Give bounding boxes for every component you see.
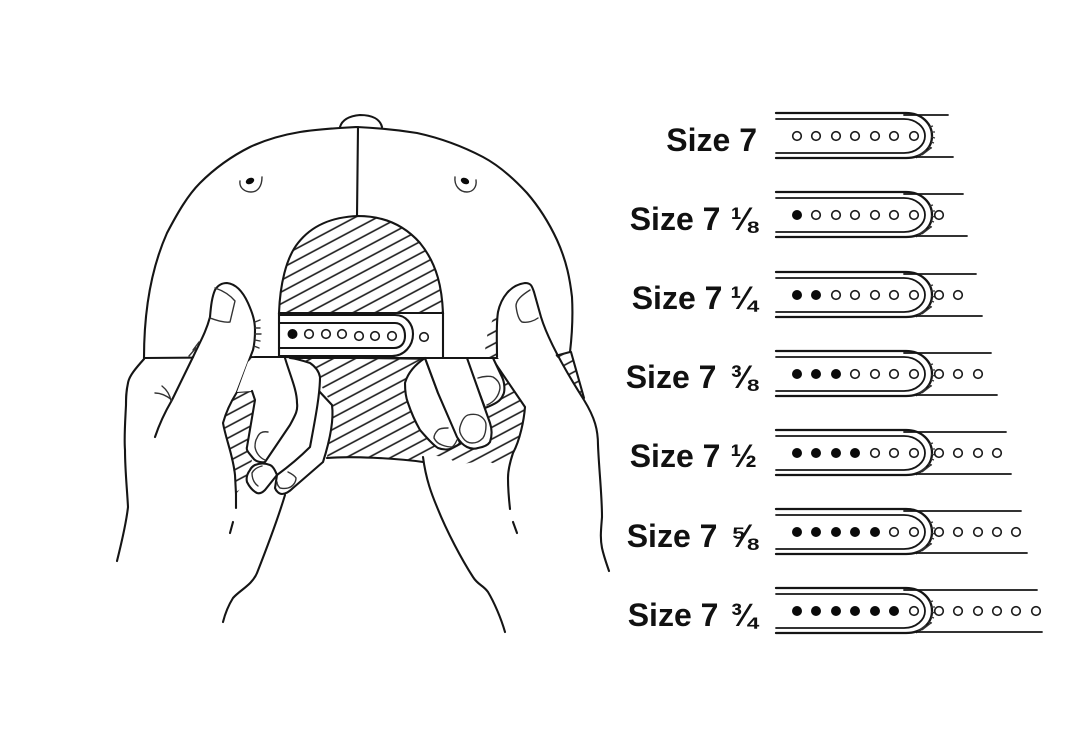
right eyelet xyxy=(455,176,476,192)
left wrist xyxy=(223,495,285,622)
size 7 3/4 row xyxy=(628,588,1042,633)
left middle finger body xyxy=(265,358,320,475)
left third finger xyxy=(275,390,333,494)
left thumb xyxy=(155,283,255,437)
size 7 1/2 row xyxy=(630,430,1011,475)
strap diagram xyxy=(776,509,1027,554)
strap diagram xyxy=(776,351,997,396)
size 7 5/8 row xyxy=(627,509,1027,554)
strap diagram xyxy=(776,272,982,317)
left hand back xyxy=(117,359,144,561)
size 7 1/8 row xyxy=(630,192,967,237)
centre seam xyxy=(357,127,358,216)
strap diagram xyxy=(776,430,1011,475)
left hand xyxy=(117,283,333,622)
label: Size 7 ¼ xyxy=(632,280,759,316)
size 7 row xyxy=(666,113,953,158)
label: Size 7 ⅝ xyxy=(627,518,759,554)
hatched patch: left xyxy=(223,391,255,494)
strap holes xyxy=(288,329,428,341)
strap diagram xyxy=(776,588,1042,633)
cap button xyxy=(340,115,382,127)
right middle finger xyxy=(425,358,492,449)
hatched wedge beside right thumb xyxy=(484,308,584,398)
label: Size 7 ¾ xyxy=(628,597,759,633)
strap diagram xyxy=(776,192,967,237)
label: Size 7 ½ xyxy=(630,438,757,474)
left wrist dash xyxy=(230,522,233,533)
cap crown outline xyxy=(144,127,572,359)
size 7 1/4 row xyxy=(632,272,982,317)
left thumbnail xyxy=(210,288,235,322)
label: Size 7 ⅜ xyxy=(626,359,759,395)
size 7 3/8 row xyxy=(626,351,997,396)
illustration: hands adjusting cap strap xyxy=(117,115,609,632)
right hand xyxy=(405,283,609,632)
left index finger xyxy=(237,357,297,462)
hatched cap opening xyxy=(279,216,443,313)
right index finger xyxy=(405,358,460,450)
left eyelet xyxy=(240,176,262,192)
strap diagram xyxy=(776,113,953,158)
hatched cap underside xyxy=(300,358,525,467)
strap xyxy=(279,313,443,358)
right palm xyxy=(423,360,525,632)
right thumbnail xyxy=(516,290,538,322)
right third finger xyxy=(467,358,504,408)
label: Size 7 ⅛ xyxy=(630,201,759,237)
right thumb xyxy=(497,283,609,571)
thumb base hairs xyxy=(189,320,261,356)
left crease xyxy=(155,386,172,401)
left middle fingertip xyxy=(247,464,277,493)
label: Size 7 xyxy=(666,122,757,158)
right wrist dash xyxy=(513,522,517,533)
